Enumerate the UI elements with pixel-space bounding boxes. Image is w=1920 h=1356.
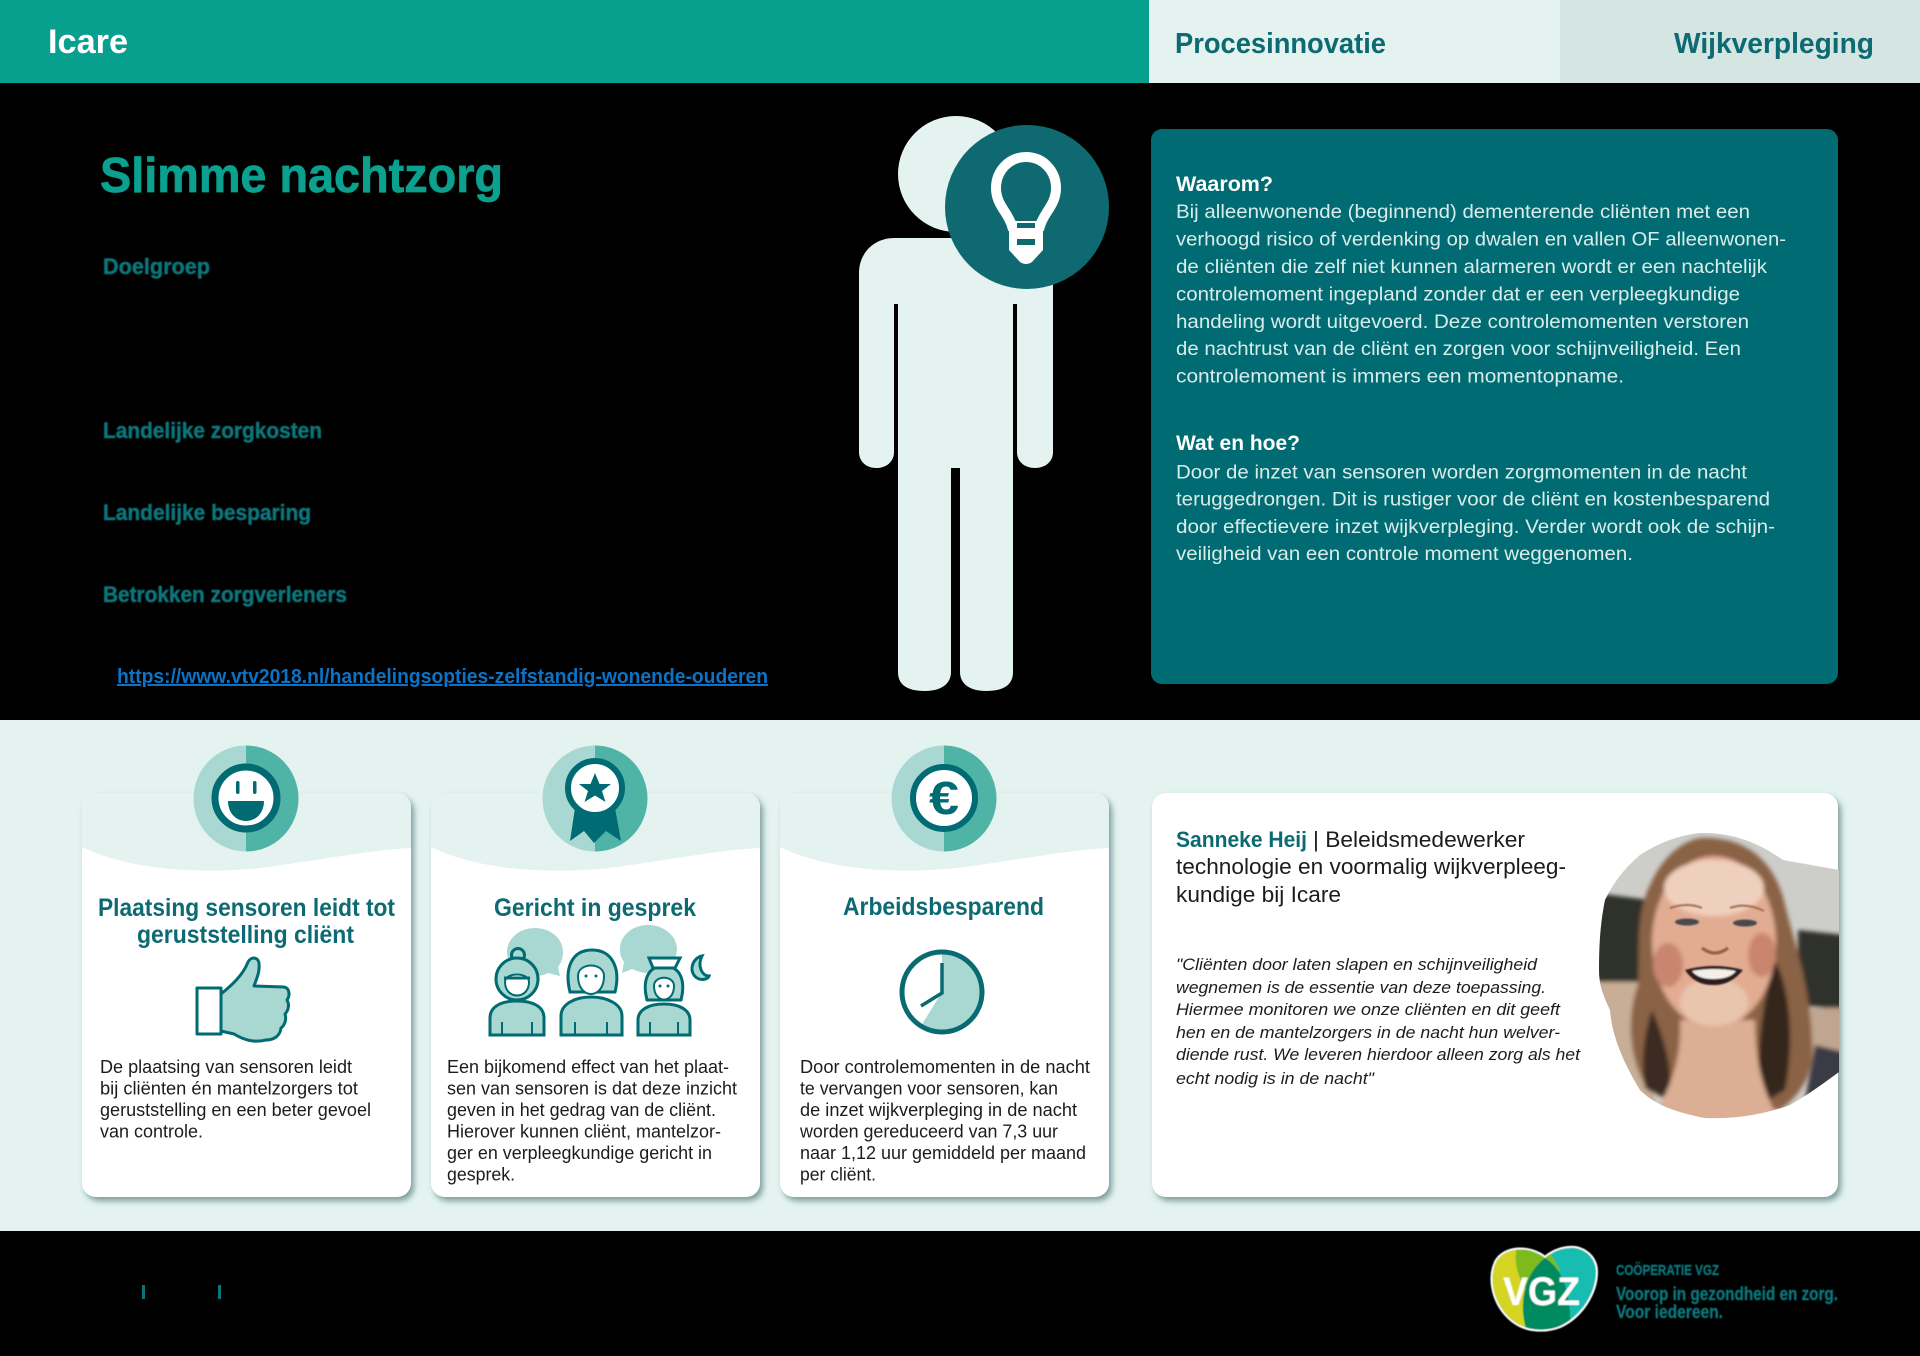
tagline: Voor iedereen.: [1616, 1302, 1723, 1322]
icon: euro: €: [929, 772, 959, 824]
text block: why: verhoogd risico of verdenking op dwalen en vallen OF alleenwonen-: [1176, 228, 1786, 250]
card text: ger en verpleegkundige gericht in: [447, 1143, 712, 1163]
quote text: hen en de mantelzorgers in de nacht hun welver-: [1176, 1023, 1560, 1042]
organisation name: Icare: [48, 23, 128, 61]
source link: https://www.vtv2018.nl/handelingsopties-zelfstandig-wonende-ouderen: [117, 666, 768, 688]
text block: what and how: Door de inzet van sensoren worden zorgmomenten in de nacht: [1176, 462, 1748, 484]
facts list: [103, 254, 347, 607]
icon: thumbs up: [197, 958, 289, 1041]
label: target group: Doelgroep: [103, 254, 210, 279]
card heading: Arbeidsbesparend: [843, 893, 1044, 921]
category tab: Wijkverpleging: Wijkverpleging: [1674, 28, 1874, 60]
logo: VGZ heart: [1488, 1244, 1600, 1334]
category tab: Procesinnovatie: Procesinnovatie: [1175, 28, 1386, 60]
text block: why: controlemoment is immers een momentopname.: [1176, 366, 1624, 388]
person one: [490, 948, 544, 1035]
quote author: | Beleidsmedewerker: [1313, 827, 1525, 852]
text block: what and how: veiligheid van een controle moment weggenomen.: [1176, 543, 1633, 565]
quote text: echt nodig is in de nacht": [1176, 1069, 1375, 1088]
panel: card labour saving: [780, 746, 1109, 1197]
quote author: [1176, 827, 1566, 907]
person two: [561, 950, 622, 1035]
panel: card sensors: [82, 746, 411, 1197]
separator ticks: [142, 1285, 221, 1299]
header bar: [0, 0, 1920, 83]
panel: card conversation: [431, 746, 760, 1197]
text block: why: Bij alleenwonende (beginnend) dementerende cliënten met een: [1176, 201, 1750, 223]
tagline: COÖPERATIE VGZ: [1616, 1262, 1719, 1279]
quote author: kundige bij Icare: [1176, 882, 1341, 907]
label: national care costs: Landelijke zorgkosten: [103, 418, 322, 443]
quote text: wegnemen is de essentie van deze toepassing.: [1176, 978, 1546, 997]
card text: [100, 1057, 371, 1142]
card text: [447, 1057, 737, 1184]
person silhouette with light bulb: [859, 116, 1109, 691]
card text: gesprek.: [447, 1164, 515, 1184]
card heading: geruststelling cliënt: [137, 921, 355, 949]
text block: what and how: [1176, 462, 1775, 565]
panel: why and what: [1151, 129, 1838, 684]
card text: worden gereduceerd van 7,3 uur: [799, 1122, 1058, 1142]
card text: sen van sensoren is dat deze inzicht: [447, 1078, 737, 1098]
person three: nurse: [638, 958, 690, 1035]
label: involved caregivers: Betrokken zorgverleners: [103, 582, 347, 607]
lower section background: [0, 720, 1920, 1231]
card text: naar 1,12 uur gemiddeld per maand: [800, 1143, 1086, 1163]
card text: geven in het gedrag van de cliënt.: [447, 1100, 716, 1120]
card text: de inzet wijkverpleging in de nacht: [800, 1100, 1077, 1120]
tagline: Voorop in gezondheid en zorg.: [1616, 1284, 1838, 1304]
footer: [142, 1244, 1838, 1332]
icon: medal: [543, 746, 648, 852]
quote text: diende rust. We leveren hierdoor alleen zorg als het: [1176, 1045, 1581, 1064]
tagline: [1616, 1262, 1838, 1322]
card text: per cliënt.: [800, 1164, 876, 1184]
card text: De plaatsing van sensoren leidt: [100, 1057, 352, 1077]
icon: three people talking: [490, 925, 709, 1035]
text block: what and how: teruggedrongen. Dit is rustiger voor de cliënt en kostenbesparend: [1176, 488, 1770, 510]
card text: [799, 1057, 1090, 1184]
quote author: Sanneke Heij: [1176, 827, 1307, 852]
logo: VGZ heart: VGZ: [1503, 1270, 1580, 1314]
card text: Een bijkomend effect van het plaat-: [447, 1057, 729, 1077]
heading: why: Waarom?: [1176, 173, 1273, 196]
photo: portrait: [1595, 828, 1845, 1123]
text block: why: de nachtrust van de cliënt en zorgen voor schijnveiligheid. Een: [1176, 338, 1741, 360]
quote text: Hiermee monitoren we onze cliënten en dit geeft: [1176, 1000, 1561, 1019]
panel: quote: [1152, 793, 1845, 1197]
card text: Hierover kunnen cliënt, mantelzor-: [447, 1122, 721, 1142]
moon: [692, 956, 709, 979]
quote text: [1176, 955, 1581, 1088]
title: Slimme nachtzorg: [100, 149, 503, 203]
icon: euro: [892, 746, 997, 852]
card text: bij cliënten én mantelzorgers tot: [100, 1078, 358, 1098]
text block: why: controlemoment ingepland zonder dat er een verpleegkundige: [1176, 284, 1740, 306]
card text: te vervangen voor sensoren, kan: [800, 1078, 1058, 1098]
icon: smiley: [194, 746, 298, 852]
quote text: "Cliënten door laten slapen en schijnveiligheid: [1176, 955, 1538, 974]
card text: geruststelling en een beter gevoel: [100, 1100, 371, 1120]
text block: why: [1176, 201, 1786, 388]
card text: van controle.: [100, 1122, 203, 1142]
label: national savings: Landelijke besparing: [103, 500, 311, 525]
heading: what and how: Wat en hoe?: [1176, 432, 1300, 455]
icon: light bulb: [945, 125, 1109, 289]
text block: what and how: door effectievere inzet wijkverpleging. Verder wordt ook de schijn-: [1176, 516, 1775, 538]
card heading: Plaatsing sensoren leidt tot: [98, 894, 396, 922]
speech bubble right: [620, 925, 677, 973]
quote author: technologie en voormalig wijkverpleeg-: [1176, 854, 1566, 879]
card heading: [98, 894, 396, 949]
icon: clock: [902, 952, 982, 1032]
text block: why: handeling wordt uitgevoerd. Deze controlemomenten verstoren: [1176, 311, 1749, 333]
person silhouette: [859, 116, 1053, 691]
card heading: Gericht in gesprek: [494, 894, 696, 922]
card text: Door controlemomenten in de nacht: [800, 1057, 1090, 1077]
speech bubble left: [507, 928, 563, 976]
text block: why: de cliënten die zelf niet kunnen alarmeren wordt er een nachtelijk: [1176, 256, 1767, 278]
